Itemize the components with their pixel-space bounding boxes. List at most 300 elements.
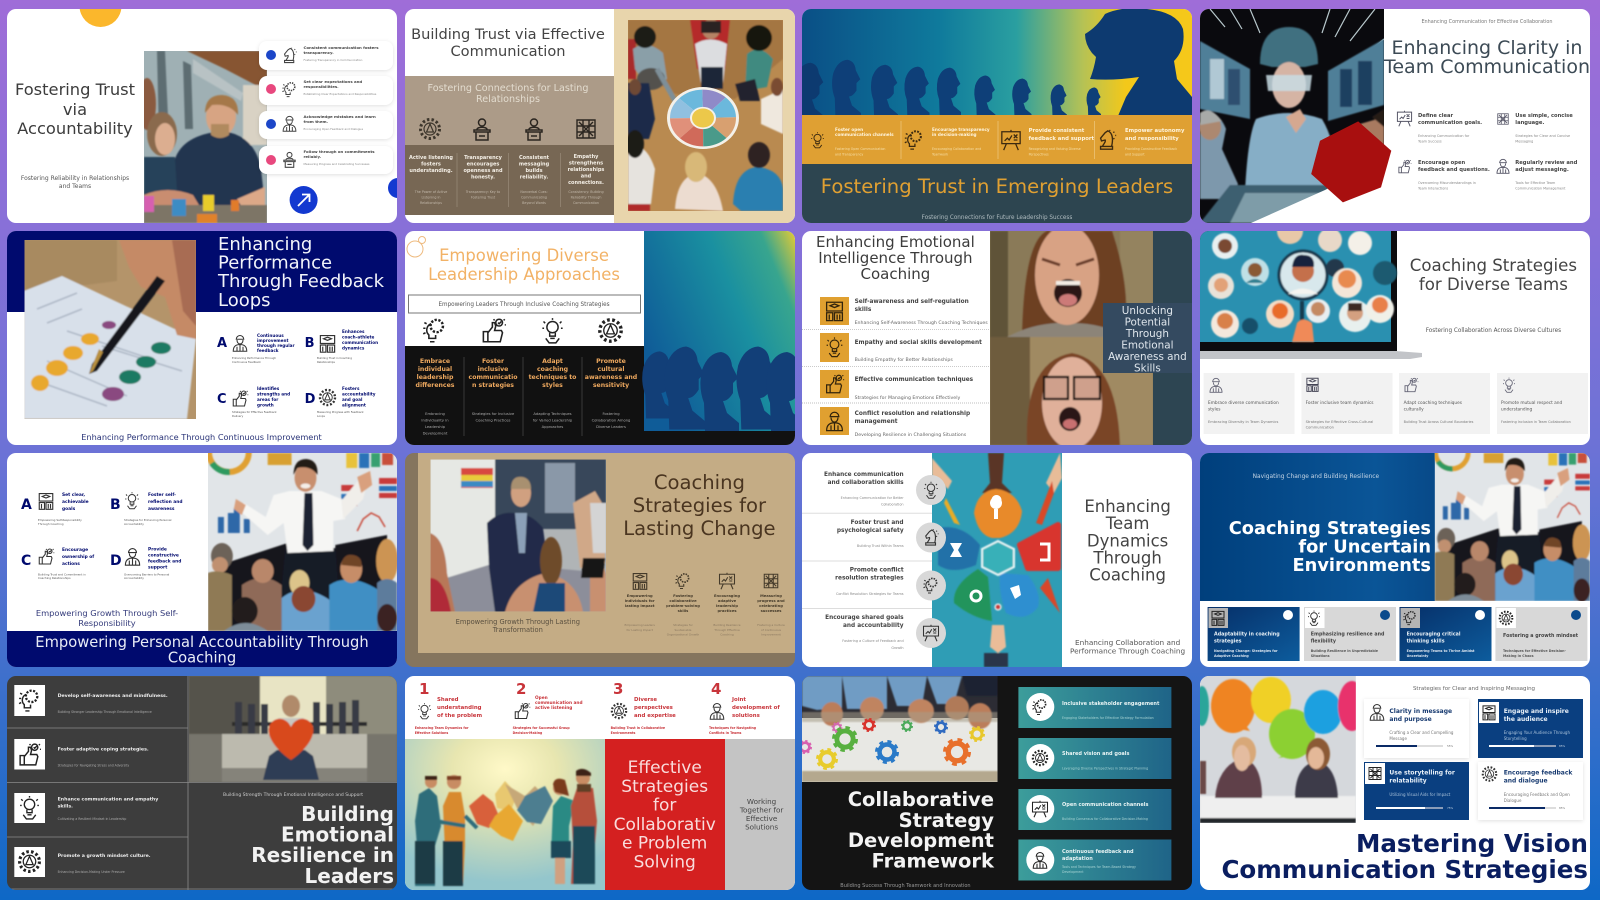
tile 2: Foster inclusive team dynamics (1306, 400, 1374, 406)
title: Environments (1293, 555, 1431, 576)
title (217, 234, 385, 311)
tile 3: Uncertainty (1407, 654, 1429, 658)
tile 1: 55% (1447, 744, 1454, 748)
photo: two women and speech bubbles (1200, 676, 1356, 823)
item card 3: Acknowledge mistakes and learn (304, 114, 376, 119)
title: Leaders (305, 864, 394, 888)
item card 2: responsibilities. (304, 84, 339, 89)
tile 3 (1364, 762, 1469, 820)
tip 2: Strategies for Clear and Concise (1515, 134, 1570, 138)
tile 3: Adapt coaching techniques (1404, 400, 1463, 406)
step 2 (513, 680, 583, 735)
tip 3: Encourage open (1418, 160, 1466, 166)
tip 2 (1498, 113, 1573, 144)
orange band with four points: and responsibility (1125, 136, 1179, 142)
item card 3: from them. (304, 119, 329, 124)
tile 1 (1208, 607, 1300, 661)
caption: Responsibility (78, 618, 136, 628)
tile 4 (1496, 607, 1588, 661)
eyebrow text: Navigating Change and Building Resilience (1253, 474, 1380, 480)
tip 1: Enhancing Communication for (1418, 134, 1470, 138)
benefit D: accountability (342, 392, 376, 396)
red title panel: for (653, 796, 677, 816)
benefit D: Loops (317, 414, 325, 418)
orange band with four points: Encourage transparency (932, 127, 990, 132)
panel: Enhancing Team Dynamics Through Coaching (802, 453, 1192, 667)
strategy 2 (666, 574, 700, 636)
taupe band with subtitle and icons: Relationships (476, 94, 540, 105)
strategy 3: Coaching (720, 632, 734, 636)
dark band with four points: understanding. (410, 168, 453, 174)
callout box: Skills (1134, 362, 1161, 374)
title: Leadership Approaches (428, 265, 620, 284)
gray subtitle panel (725, 739, 795, 890)
tip 3: feedback and questions. (1418, 167, 1490, 173)
action A: Through Coaching (37, 522, 64, 526)
skill 4 (820, 407, 970, 438)
title: for Diverse Teams (1419, 275, 1568, 294)
orange band with four points: communication channels (835, 132, 894, 137)
item card 1: Fostering Transparency in Communication (304, 58, 363, 62)
title (1085, 497, 1171, 584)
benefit B: coach-athlete (342, 334, 374, 340)
step 1: of the problem (437, 713, 483, 719)
benefit C: Identifies (257, 386, 280, 391)
photo: hands placing gears (802, 676, 998, 782)
eyebrow text: Enhancing Communication for Effective Collaboration (1422, 19, 1553, 25)
strategy 1: individuals for (625, 599, 655, 603)
item card 3: Encouraging Open Feedback and Dialogue (304, 127, 363, 131)
action B: awareness (148, 506, 175, 512)
tile 1: Adaptability in coaching (1214, 632, 1280, 638)
caption: Transformation (492, 626, 543, 634)
benefit A: Enhancing Performance Through (232, 356, 276, 360)
beige side panel (614, 9, 795, 223)
dark band with four points (405, 145, 614, 215)
dark band with four points: and (581, 174, 592, 180)
four approach columns: differences (416, 382, 455, 389)
skill 2: Empathy and social skills development (855, 340, 982, 346)
four approach columns: Embracing (425, 412, 445, 416)
tip 2: Messaging (1515, 140, 1534, 144)
tile 1: Embracing Diversity in Team Dynamics (1208, 420, 1279, 424)
title (848, 788, 995, 872)
strategy tiles (1204, 373, 1588, 434)
eyebrow text: Strategies for Clear and Inspiring Messaging (1413, 686, 1535, 692)
subtitle: and Teams (59, 183, 91, 190)
tan inner panel (418, 453, 795, 653)
strategy 4: Fostering a Culture (757, 623, 785, 627)
tile 2 (1302, 373, 1393, 434)
caption: Empowering Growth Through Lasting (456, 618, 580, 626)
step 4: Joint (731, 697, 747, 703)
caption (36, 608, 178, 628)
strategy 4: successes (761, 609, 782, 613)
tile 1 (1204, 373, 1295, 434)
title: Through (1093, 548, 1162, 568)
dark band with four points: Listening in (422, 196, 441, 200)
dynamics list (824, 472, 904, 650)
benefit A: Continuous Feedback (232, 360, 261, 364)
dark teal side panel (1153, 231, 1192, 445)
strategy 3 (713, 573, 741, 636)
benefit A: improvement (257, 338, 288, 343)
skill 3: Effective communication techniques (855, 377, 974, 383)
four approach columns: Fostering (603, 412, 620, 416)
tip 3: Team Interactions (1417, 186, 1449, 190)
four actions (21, 492, 182, 580)
four numbered steps (415, 680, 781, 735)
strategy 2: Organizational Growth (667, 632, 700, 636)
dark band with four points: openness and (464, 168, 503, 174)
title: Enhancing Emotional (816, 233, 975, 251)
benefit D: alignment (342, 402, 366, 408)
action C: ownership of (62, 554, 94, 560)
tip 1: communication goals. (1418, 120, 1482, 126)
gray subtitle panel: Solutions (745, 822, 779, 832)
gray subtitle panel: Working (747, 797, 776, 806)
action B: Foster self- (148, 492, 176, 498)
strategy 2: Sustainable (675, 628, 692, 632)
item 4: and accountability (843, 623, 904, 629)
dark band with four points: Consistency: Building (569, 190, 604, 194)
benefit C: Delivery (232, 414, 244, 418)
photo: coach at whiteboard (208, 432, 398, 632)
strategy 2: collaborative (670, 599, 697, 603)
step 4: adaptation (1062, 856, 1093, 862)
subtitle box: Empowering Leaders Through Inclusive Coaching Strategies (439, 302, 610, 308)
orange band with four points: Teamwork (931, 152, 948, 156)
panel: Collaborative Strategy Development Framework (802, 676, 1192, 890)
orange band with four points: Perspectives (1029, 152, 1049, 156)
navy title band: Coaching (168, 650, 236, 666)
action C: Encourage (62, 547, 88, 553)
orange band with four points: Provide consistent (1029, 128, 1085, 134)
orange band with four points (802, 115, 1192, 164)
orange band with four points: Providing Constructive Feedback (1125, 147, 1177, 151)
benefit C: C (217, 392, 227, 407)
dark band with four points: connections. (568, 180, 604, 186)
tip 3 (1399, 160, 1490, 190)
decorative rings (407, 236, 426, 257)
item 3: Conflict Resolution Strategies for Teams (836, 592, 904, 596)
photo: pen on checklist (24, 240, 196, 419)
panel: Coaching Strategies for Diverse Teams (1200, 231, 1590, 445)
callout box: Awareness and (1108, 351, 1187, 363)
step 1 (1019, 687, 1172, 728)
photo: two shouting women (990, 231, 1153, 445)
action A: Set clear, (62, 492, 85, 498)
strategy 4: celebrating (759, 604, 783, 608)
panel: Empowering Diverse Leadership Approaches (405, 231, 795, 445)
illustration: people joining puzzle (405, 739, 605, 890)
benefit B: Building Trust in Coaching (317, 356, 352, 360)
gray subtitle panel: Effective (746, 814, 778, 823)
panel: Building Emotional Resilience in Leaders (7, 676, 397, 890)
dark band with four points: relationships (568, 167, 605, 173)
step 2: Strategies for Successful Group (513, 726, 571, 730)
step 2: active listening (535, 705, 573, 711)
four approach columns: for Varied Leadership (533, 418, 573, 422)
title: Collaborative (848, 788, 994, 811)
strategy 3: leadership (716, 604, 739, 608)
step 3: perspectives (634, 705, 673, 711)
tile 2: Situations (1311, 654, 1330, 658)
dark band with four points: Transparency: Key to (465, 190, 500, 194)
orange band with four points: and Transparency (835, 152, 864, 156)
strategy 1: Empowering Leaders (625, 623, 656, 627)
tile 2: Strategies for Effective Cross-Cultural (1306, 420, 1373, 424)
skill 1 (820, 297, 988, 326)
tile 3 (1400, 607, 1492, 661)
title: Coaching Strategies (1410, 256, 1577, 275)
framework steps (1019, 687, 1172, 880)
action B: reflection and (148, 499, 182, 505)
action C: Coaching Relationships (38, 576, 71, 580)
photo: laptop with faces (1200, 218, 1422, 359)
panel: Mastering Vision Communication Strategies (1200, 676, 1590, 890)
dark band with four points: builds (526, 168, 543, 174)
four approach columns: Individuality in (422, 418, 449, 422)
benefit C: growth (257, 402, 274, 408)
strategy 2: skills (678, 609, 689, 613)
four approach columns: n strategies (472, 382, 515, 389)
callout box (1103, 303, 1192, 374)
four approach columns: Development (423, 432, 448, 436)
photo: gradient with silhouettes (642, 231, 805, 431)
benefit D: and goal (342, 397, 363, 402)
tile 3: Utilizing Visual Aids for Impact (1390, 792, 1451, 797)
decorative red hexagon (1311, 121, 1391, 202)
orange band with four points: and Support (1125, 152, 1146, 156)
item card 2 (259, 76, 393, 105)
strategy 4: of Continuous (761, 628, 782, 632)
title: Lasting Change (623, 517, 776, 540)
panel: Empowering Personal Accountability Through Coaching (7, 453, 397, 667)
tile 2: Engaging Your Audience Through (1504, 730, 1571, 735)
subtitle box (409, 295, 641, 313)
red title panel: Effective (628, 758, 702, 778)
step 4: solutions (732, 713, 760, 719)
four approach columns: Approaches (542, 425, 564, 429)
callout box: Potential (1125, 316, 1170, 328)
panel: Building Trust via Effective Communication (405, 9, 795, 223)
item 1 (824, 472, 904, 506)
caption: Empowering Growth Through Self- (36, 608, 178, 618)
four approach columns: Collaboration Among (592, 418, 631, 422)
tile 2: Building Resilience in Unpredictable (1311, 649, 1379, 653)
four approach columns: Embrace (420, 358, 450, 365)
dark band with four points: encourages (467, 162, 500, 168)
step 1: Effective Solutions (415, 731, 449, 735)
skill 2: Building Empathy for Better Relationships (855, 357, 954, 363)
title: Dynamics (1087, 532, 1168, 550)
caption: Performance Through Coaching (1070, 646, 1185, 656)
tip 4: Communication Management (1515, 186, 1566, 190)
gray subtitle panel: Together for (739, 806, 784, 814)
four approach columns: styles (542, 382, 563, 389)
action D: Provide (148, 546, 167, 552)
dark band with four points: Fostering Trust (471, 196, 496, 200)
step 2: Open (535, 695, 548, 701)
four approach columns: sensitivity (593, 382, 629, 389)
four approach columns: techniques to (529, 374, 577, 381)
practice 1: Develop self-awareness and mindfulness. (58, 693, 168, 699)
blue header (1200, 453, 1590, 601)
dark band (802, 164, 1192, 223)
step 2 (1019, 738, 1172, 779)
tile 1: strategies (1214, 638, 1242, 644)
dark band with four points: fosters (421, 162, 441, 168)
action D: constructive (148, 552, 179, 558)
orange band with four points: Encouraging Collaboration and (932, 147, 981, 151)
footer caption: Enhancing Performance Through Continuous Improvement (81, 432, 323, 442)
photo: leader silhouette and crowd (795, 8, 1192, 122)
tile 2: Engage and inspire (1504, 708, 1569, 715)
tile 4 (1497, 373, 1588, 434)
strategy 1: lasting impact (625, 604, 655, 608)
title: for Uncertain (1299, 536, 1431, 558)
step 3 (1019, 789, 1172, 830)
callout box: Emotional (1121, 340, 1174, 352)
panel: Enhancing Performance Through Feedback Loops (7, 231, 397, 445)
message tiles (1364, 699, 1583, 820)
four approach columns: Coaching Practices (476, 418, 511, 422)
four approach columns: Foster (482, 358, 505, 365)
title: Strategies for (633, 494, 767, 517)
tile 1: Crafting a Clear and Compelling (1390, 730, 1454, 735)
dark band with four points: messaging (519, 162, 550, 168)
list of practices (14, 685, 168, 877)
skill 1: skills (855, 307, 872, 313)
action C: C (21, 553, 31, 569)
step 4: Techniques for Navigating (709, 726, 757, 730)
benefit C (217, 386, 290, 418)
title: Accountability (17, 119, 133, 138)
tile 2: Communication (1306, 426, 1334, 430)
four tips (1398, 111, 1578, 190)
dark band with four points: Beyond Words (522, 201, 546, 205)
tile 3: Use storytelling for (1390, 770, 1455, 776)
item 3: resolution strategies (835, 576, 904, 582)
benefit A: A (217, 336, 227, 351)
four approach columns: Adapt (542, 358, 563, 365)
benefit A: feedback (257, 348, 279, 353)
item 4 (825, 615, 904, 650)
caption (1070, 638, 1185, 656)
strategy 4: Improvement (761, 632, 782, 636)
footer caption: Building Success Through Teamwork and Innovation (840, 883, 971, 889)
dark band with four points: Empathy (574, 154, 599, 160)
dark band with four points: The Power of Active (414, 190, 448, 194)
practice 2 (14, 739, 149, 770)
four approach columns: Strategies for Inclusive (472, 412, 515, 416)
tip 2: language. (1515, 120, 1545, 126)
panel: Fostering Trust in Emerging Leaders (802, 9, 1192, 223)
separators (802, 513, 932, 608)
strategy 4 (757, 574, 785, 636)
step 2: Decision-Making (513, 731, 543, 735)
strategy 3: Encouraging (714, 594, 741, 598)
four approach columns: individual (418, 366, 452, 373)
benefit B: dynamics (342, 346, 365, 350)
step 4: 4 (711, 680, 722, 698)
step 4: Continuous feedback and (1062, 849, 1134, 855)
dark band with four points: Nonverbal Cues: (521, 190, 548, 194)
tile 3 (1399, 373, 1490, 434)
four approach columns (416, 357, 637, 436)
tip 1 (1398, 111, 1482, 144)
tip 4: Regularly review and (1515, 160, 1578, 166)
title: Coaching (1089, 566, 1166, 584)
title: Communication Strategies (1222, 855, 1588, 884)
title (1383, 37, 1590, 78)
practice 2: Foster adaptive coping strategies. (58, 746, 149, 752)
skill 3: Strategies for Managing Emotions Effectively (855, 395, 961, 401)
title: Through Feedback (217, 271, 385, 292)
callout box: Through (1125, 328, 1169, 340)
tile 1: styles (1208, 406, 1221, 412)
orange band with four points: Foster open (835, 127, 863, 132)
title: Enhancing Clarity in (1392, 37, 1583, 59)
benefit A: through regular (257, 343, 295, 348)
tile 4: Techniques for Effective Decision- (1503, 649, 1567, 653)
benefit C: strengths and (257, 392, 290, 396)
tile 2: Emphasizing resilience and (1311, 632, 1385, 638)
title (411, 26, 605, 60)
tile 4: Fostering Inclusion in Team Collaboration (1501, 420, 1571, 424)
four approach columns: Adapting Techniques (534, 412, 572, 416)
practice 4: Promote a growth mindset culture. (58, 853, 151, 859)
item 4: Fostering a Culture of Feedback and (842, 639, 904, 643)
orange band with four points: feedback and support (1029, 136, 1095, 142)
practice 1 (14, 685, 168, 716)
action D (110, 546, 181, 580)
step 3: and expertise (634, 713, 676, 719)
tile 4: and dialogue (1504, 778, 1548, 784)
strategy 1: for Lasting Impact (627, 628, 654, 632)
subtitle: Fostering Connections for Future Leadership Success (922, 215, 1073, 221)
item 2: Building Trust Within Teams (857, 544, 904, 548)
title: Coaching Strategies (1229, 518, 1431, 539)
title: Intelligence Through (818, 249, 973, 267)
action A: A (21, 497, 32, 513)
four approach columns: Diverse Leaders (596, 425, 626, 429)
four approach columns: Promote (596, 358, 626, 365)
orange band with four points: Empower autonomy (1125, 128, 1185, 134)
icon row (423, 318, 621, 343)
strategy 3: Through Effective (713, 628, 740, 632)
item 4: Encourage shared goals (825, 615, 904, 621)
tile 1: and purpose (1390, 716, 1432, 723)
partial blue circle at edge (388, 178, 408, 198)
strategy 4: progress and (757, 599, 785, 603)
tile 3: relatability (1390, 778, 1427, 784)
panel: Coaching Strategies for Lasting Change (405, 453, 795, 667)
tile 2 (1478, 699, 1583, 758)
benefit B: Relationships (317, 360, 335, 364)
skill 1: Enhancing Self-Awareness Through Coaching Techniques (855, 320, 988, 326)
dark band with four points: Relationships (420, 201, 442, 205)
tip 3: Overcoming Misunderstandings in (1418, 181, 1476, 185)
tile 1: Message (1390, 736, 1408, 741)
step 3: Building Trust in Collaborative (611, 726, 665, 730)
subtitle (21, 175, 129, 190)
photo: woman with helmet and screens (1200, 9, 1384, 223)
dark band with four points: Consistent (519, 155, 550, 161)
item 1: Collaboration (881, 502, 904, 506)
strategy 3: Building Resilience (714, 623, 741, 627)
